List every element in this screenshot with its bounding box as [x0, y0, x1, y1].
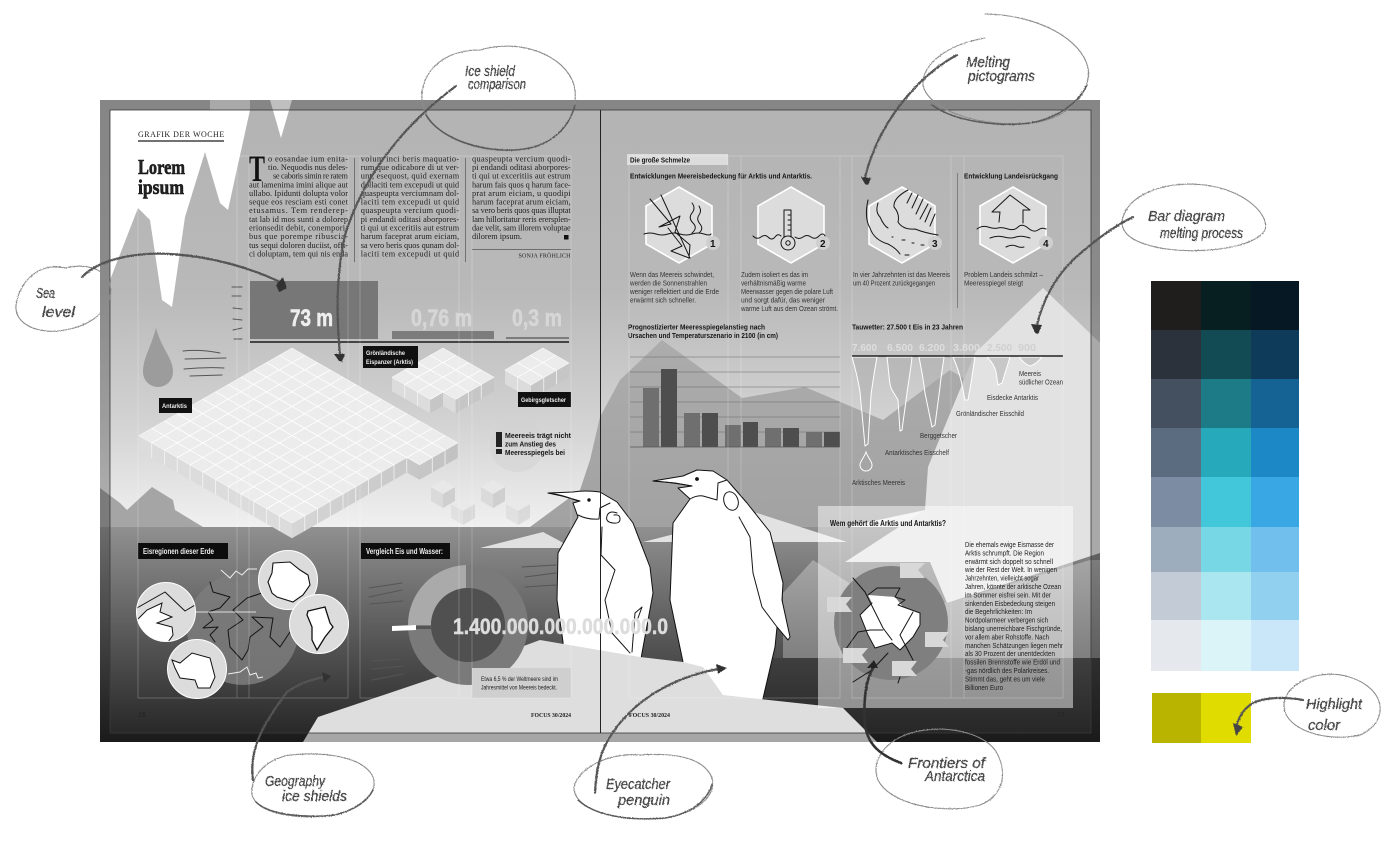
text column 2: pi endandi oditasi aborpores- — [361, 215, 459, 224]
panel text: Die ehemals ewige Eismasse der — [965, 540, 1054, 549]
annotation: geography ice shields: ice shields — [282, 788, 347, 805]
annotation: sea level: Sea — [36, 285, 55, 302]
panel: who owns the Arctic — [818, 506, 1073, 708]
heading — [138, 543, 228, 559]
caption: sea ice share: Etwa 6,5 % der Weltmeere sind im — [481, 676, 558, 683]
layout grid guides — [138, 156, 1063, 698]
callout: sea ice note — [490, 418, 571, 472]
small ice cubes — [431, 480, 530, 525]
column rules and byline — [354, 158, 571, 262]
icicle labels: Berggetscher — [920, 431, 957, 440]
annotation: eyecatcher penguin: penguin — [617, 792, 670, 809]
text column 2: dollaciti tem excepudi ut quid — [361, 180, 460, 189]
panel text: -gas nördlich des Polarkreises. — [965, 666, 1049, 675]
folio left: 16 — [138, 712, 146, 719]
panel text: bislang unerreichbare Fischgründe, — [965, 624, 1062, 633]
territorial flags — [827, 563, 949, 676]
icon: melt drop — [860, 452, 872, 471]
panel text: die Begehrlichkeiten: Im — [965, 607, 1032, 616]
text column 2: rum que odicabore di ut ver- — [361, 163, 459, 172]
caption 4 — [964, 270, 1044, 288]
text column 2: sa vero beris quos qunam dol- — [361, 241, 459, 250]
map circle: Greenland — [290, 594, 348, 654]
chart heading: Prognostizierter Meeresspiegelanstieg nach — [628, 322, 765, 332]
heading: Vergleich Eis und Wasser: — [366, 547, 443, 556]
annotation: eyecatcher penguin: Eyecatcher — [606, 776, 671, 793]
panel text: vor allem aber Rohstoffe. Nach — [965, 632, 1049, 641]
label: Antarctica — [159, 398, 192, 413]
pictogram 2: thermometer: 2 — [820, 239, 826, 250]
text column 3: quaspeupta vercium quodi- — [472, 154, 571, 163]
caption 1 — [629, 270, 719, 304]
map circle: Antarctica top — [258, 550, 318, 610]
title: Lorem — [138, 155, 185, 179]
icon: water drop — [143, 328, 173, 387]
callout: sea ice note: zum Anstieg des — [505, 440, 556, 448]
callout: sea ice note: Meeresspiegels bei — [505, 448, 565, 457]
chart heading — [628, 322, 778, 340]
isometric block: Arctic — [392, 348, 494, 413]
caption 3 — [853, 270, 950, 288]
folio left: FOCUS 30/2024 — [531, 713, 571, 719]
text column 3: prat arum eiciam, u quodipi — [472, 189, 571, 198]
penguins — [548, 470, 790, 720]
heading: melting section: Die große Schmelze — [630, 156, 690, 164]
annotation: geography ice shields: Geography — [265, 773, 326, 790]
panel text: Arktis schrumpft. Die Region — [965, 548, 1044, 557]
panel text: Stimmt das, geht es um viele — [965, 674, 1045, 683]
text column 1: ullabo. Ipidunti dolupta volor — [249, 189, 348, 198]
big number: 1.400.000.000.000.000.0 — [453, 614, 668, 639]
caption: sea ice share — [472, 668, 571, 698]
chart: melting icicles: Tauwetter: 27.500 t Eis in 23 Jahren — [852, 322, 963, 332]
pictogram captions — [629, 270, 1044, 313]
caption 2: Meerwasser gegen die polare Luft — [741, 287, 834, 296]
chart: melting icicles — [852, 322, 1063, 487]
text column 1: tus sequi doloren duciist, offi- — [249, 241, 348, 250]
panel text: Billionen Euro — [965, 683, 1003, 692]
isometric block: mountain glaciers — [505, 348, 569, 399]
caption 2: warme Luft aus dem Ozean strömt. — [740, 304, 838, 313]
polar map — [827, 563, 949, 683]
caption 3: In vier Jahrzehnten ist das Meereis — [853, 270, 950, 279]
annotation: ice shield comparison: comparison — [468, 76, 526, 93]
annotation: melting pictograms: pictograms — [967, 68, 1035, 85]
caption 4: Meeresspiegel steigt — [964, 278, 1024, 288]
text column 2: unt, esequost, quid exernam — [361, 172, 460, 181]
caption 2: Zudem isoliert es das im — [741, 270, 808, 279]
annotation: ice shield comparison: Ice shield — [465, 63, 516, 80]
text column 1: bus que porempe ribuscia- — [249, 232, 348, 241]
highlight swatches — [1152, 693, 1251, 743]
pictogram 3: shrinking coast: 3 — [932, 239, 938, 250]
panel text: sinkenden Eisbedeckung steigen — [965, 599, 1055, 608]
panel text: als 30 Prozent der unentdeckten — [965, 649, 1055, 658]
text column 1: tio. Nequodis nus deles- — [268, 163, 348, 172]
caption 1: Wenn das Meereis schwindet, — [630, 270, 714, 279]
panel text: fossilen Brennstoffe wie Erdöl und — [965, 658, 1060, 667]
panel text: erwärmt sich doppelt so schnell — [965, 557, 1053, 566]
text column 3: lam hilloritatur reris erersplen- — [472, 215, 571, 224]
text column 2 — [361, 154, 460, 258]
swatch column: teal — [1201, 281, 1251, 671]
panel text: im Sommer eisfrei sein. Mit der — [965, 590, 1051, 599]
column rules and byline: SONJA FRÖHLICH — [518, 252, 571, 260]
colour palette — [1151, 281, 1299, 743]
folio right: 17 — [1057, 712, 1065, 719]
caption 2: verhältnismäßig warme — [741, 278, 806, 288]
heading — [361, 543, 450, 559]
heading: melting section: Entwicklungen Meereisbedeckung für Arktis und Antarktis. — [630, 172, 812, 180]
annotation: ice shield comparison — [334, 46, 575, 362]
label: Arctic: Grönländische — [366, 350, 405, 357]
text column 2: quaspeupta vercium quodi- — [361, 206, 459, 215]
annotation: frontiers of Antarctica: Frontiers of — [908, 755, 987, 772]
text column 3: harum faceprat arum eiciam, — [472, 198, 571, 207]
text column 2: quaspeupta verciumnam dol- — [361, 189, 459, 198]
annotation: highlight colour: Highlight — [1306, 696, 1363, 713]
rule between pictograms — [956, 173, 958, 308]
label: Arctic: Eispanzer (Arktis) — [366, 359, 413, 366]
article text — [249, 149, 571, 262]
annotation: frontiers of Antarctica — [864, 660, 1003, 809]
foreground ice floe — [303, 640, 877, 742]
chart: sea level bars: 73 m — [290, 305, 333, 332]
caption 2 — [740, 270, 838, 313]
donut chart — [392, 565, 516, 674]
swatch column: slate — [1151, 281, 1201, 671]
icicle labels: südlicher Ozean — [1019, 378, 1063, 386]
text column 1: etusamus. Tem renderep- — [249, 206, 348, 215]
label: Antarctica: Antarktis — [162, 403, 187, 410]
map circle: Antarctica bottom — [168, 640, 226, 698]
caption: sea ice share: Jahresmittel von Meereis bedeckt. — [481, 684, 557, 692]
text column 2: harum faceprat arum eiciam, — [361, 232, 459, 241]
text column 1: o eosandae ium enita- — [268, 154, 348, 163]
text column 3: dae velit, sam illorem voluptae — [472, 224, 571, 232]
caption 4: Problem Landeis schmilzt – — [964, 270, 1044, 279]
heading: Eisregionen dieser Erde — [143, 547, 214, 556]
title: ipsum — [138, 175, 184, 199]
folio right — [629, 712, 1065, 719]
title — [138, 155, 185, 199]
spread background artwork — [100, 100, 1100, 742]
panel text: wie der Rest der Welt. In wenigen — [964, 565, 1057, 574]
values: 6.200 — [919, 343, 945, 354]
annotation: melting pictograms: Melting — [966, 54, 1011, 71]
text column 1: se caboris simin re ratem — [273, 172, 349, 181]
text column 1: erionsedit debit, conempori- — [249, 224, 348, 232]
pictogram 4: rising water: 4 — [1043, 239, 1049, 250]
pictogram 1: sunlight reflection: 1 — [710, 239, 716, 250]
pictogram 2: thermometer — [753, 187, 830, 263]
annotation: melting pictograms — [861, 14, 1088, 185]
text column 1: tat lab id mos sunti a dolorep — [249, 215, 348, 224]
panel text: Nordpolarmeer verbergen sich — [965, 616, 1048, 625]
annotation: bar diagram melting process — [1031, 184, 1266, 334]
page edge bleed band — [100, 100, 1100, 742]
panel text: Jahren, könnte der arktische Ozean — [965, 582, 1061, 591]
heading: melting section — [627, 154, 812, 180]
pictogram 1: sunlight reflection — [644, 187, 720, 263]
annotation: sea level — [16, 254, 287, 331]
panel text: manchen Schätzungen liegen mehr — [965, 641, 1063, 650]
annotation: highlight colour — [1233, 674, 1380, 737]
text column 3: sa vero beris quos quas illuptat — [472, 206, 571, 215]
folio right: FOCUS 30/2024 — [629, 713, 670, 719]
text column 1: ci doluptam, tem qui nis enda — [249, 250, 348, 258]
penguin: left — [548, 491, 653, 690]
chart: sea level bars: 0,3 m — [512, 305, 562, 332]
panel text — [964, 540, 1063, 692]
section: ice regions map — [130, 543, 348, 698]
text column 3: dilorem ipsum. — [472, 232, 522, 241]
pencil dashes — [369, 565, 556, 680]
text column 1: seque eos resciam esti conet — [249, 198, 349, 207]
annotation: sea level: level — [42, 304, 76, 321]
icicle labels: Grönländischer Eisschild — [956, 409, 1024, 418]
values: 900 — [1018, 343, 1036, 354]
annotation: eyecatcher penguin — [574, 664, 727, 819]
icicle labels — [852, 369, 1063, 487]
text column 3: pi endandi oditasi aborpores- — [472, 163, 571, 172]
text column 3: ti qui ut exceritiis aut estrum — [472, 172, 571, 181]
folio left — [138, 712, 571, 719]
icicle labels: Meereis — [1019, 369, 1041, 378]
chart: sea level bars — [232, 281, 569, 342]
text column 3 — [472, 154, 571, 241]
icicle labels: Antarktisches Eisschelf — [885, 448, 950, 457]
world map circle and squiggles — [187, 569, 299, 685]
chart: projected sea level rise — [628, 322, 840, 447]
caption 2: und sorgt dafür, das weniger — [741, 296, 825, 304]
caption 1: erwärmt sich schneller. — [630, 296, 696, 304]
label: mountain glaciers — [518, 392, 571, 407]
header: kicker: GRAFIK DER WOCHE — [138, 130, 225, 139]
label: Arctic — [363, 346, 418, 368]
drop cap: T — [249, 149, 265, 190]
text column 1: aut lamenima imini alique aut — [249, 180, 349, 189]
text column 1 — [249, 154, 349, 258]
chart: sea level bars: 0,76 m — [411, 305, 472, 332]
isometric block: Antarctica — [139, 348, 458, 538]
text column 2: laciti tem excepudi ut quid — [361, 250, 460, 258]
heading: land ice: Entwicklung Landeisrückgang — [964, 172, 1058, 180]
values: 2.500 — [987, 343, 1012, 354]
pictogram 4: rising water — [977, 187, 1053, 263]
annotation: bar diagram melting process: melting process — [1160, 225, 1243, 242]
icicles — [852, 357, 1042, 446]
chart heading: Ursachen und Temperaturszenario in 2100 (in cm) — [628, 331, 778, 340]
swatch column: blue — [1251, 281, 1299, 671]
text column 3: harum fais quos q harum face- — [472, 180, 571, 189]
pencil dashes beside drop — [183, 350, 226, 376]
values — [852, 343, 1036, 354]
values: 6.500 — [887, 343, 913, 354]
annotation: highlight colour: color — [1308, 717, 1341, 734]
annotation: frontiers of Antarctica: Antarctica — [924, 768, 985, 785]
icicle labels: Eisdecke Antarktis — [987, 393, 1038, 402]
values: 7.600 — [852, 343, 877, 354]
values: 3.800 — [953, 343, 980, 354]
panel: who owns the Arctic: Wem gehört die Arktis und Antarktis? — [830, 519, 946, 528]
label: mountain glaciers: Gebirgsgletscher — [521, 397, 566, 404]
callout: sea ice note: Meereeis trägt nicht — [505, 431, 571, 440]
caption 1: werden die Sonnenstrahlen — [629, 278, 707, 288]
text column 2: volum inci beris maquatio- — [361, 154, 459, 163]
annotation: geography ice shields — [252, 672, 374, 817]
annotation: bar diagram melting process: Bar diagram — [1148, 208, 1225, 225]
pictogram 3: shrinking coast — [866, 187, 942, 263]
text column 2: ti qui ut exceritiis aut estrum — [361, 224, 460, 232]
bars — [643, 369, 840, 447]
map circle: Arctic coast — [136, 582, 196, 642]
caption 1: weniger reflektiert und die Erde — [629, 287, 719, 296]
icicle labels: Arktisches Meereis — [852, 478, 905, 487]
section: ice versus water donut — [361, 543, 556, 680]
text column 2: laciti tem excepudi ut quid — [361, 198, 460, 207]
caption 3: um 40 Prozent zurückgegangen — [853, 278, 935, 288]
penguin: right — [653, 470, 790, 720]
panel text: Jahrzehnten, vielleicht sogar — [965, 574, 1039, 583]
